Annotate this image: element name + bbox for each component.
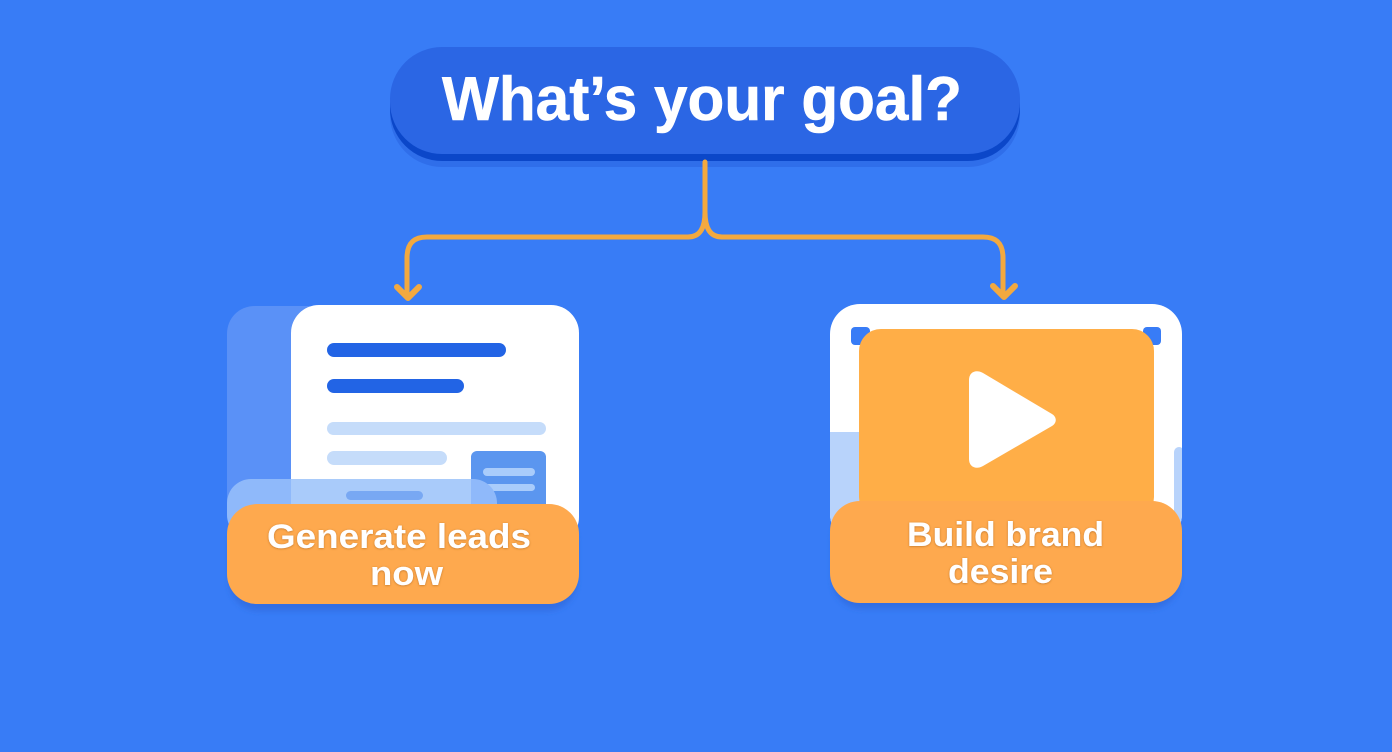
panel: build brand desire bbox=[830, 304, 1184, 609]
label: generate leads now: Generate leads bbox=[267, 518, 531, 556]
infographic canvas bbox=[227, 47, 1182, 612]
label: build brand desire: desire bbox=[948, 553, 1053, 591]
video card frame bbox=[830, 304, 1184, 544]
label: generate leads now: now bbox=[370, 555, 444, 593]
small blue document bbox=[471, 451, 546, 521]
title pill bbox=[390, 47, 1020, 167]
label: build brand desire: Build brand bbox=[907, 516, 1104, 554]
branching connector arrows bbox=[397, 162, 1015, 298]
label: generate leads now bbox=[227, 504, 579, 604]
label shadow bbox=[229, 512, 577, 611]
panel: generate leads bbox=[227, 305, 579, 611]
label: build brand desire bbox=[830, 501, 1182, 603]
video thumbnail bbox=[859, 329, 1154, 519]
label shadow bbox=[832, 510, 1180, 609]
corner markers bbox=[851, 327, 1161, 345]
form heading lines bbox=[327, 343, 506, 393]
title text: What’s your goal? bbox=[442, 65, 962, 134]
icon: play button bbox=[969, 371, 1056, 468]
back panel bbox=[227, 306, 310, 510]
form card bbox=[291, 305, 579, 545]
translucent tab bbox=[227, 479, 497, 539]
form field lines bbox=[327, 422, 546, 465]
